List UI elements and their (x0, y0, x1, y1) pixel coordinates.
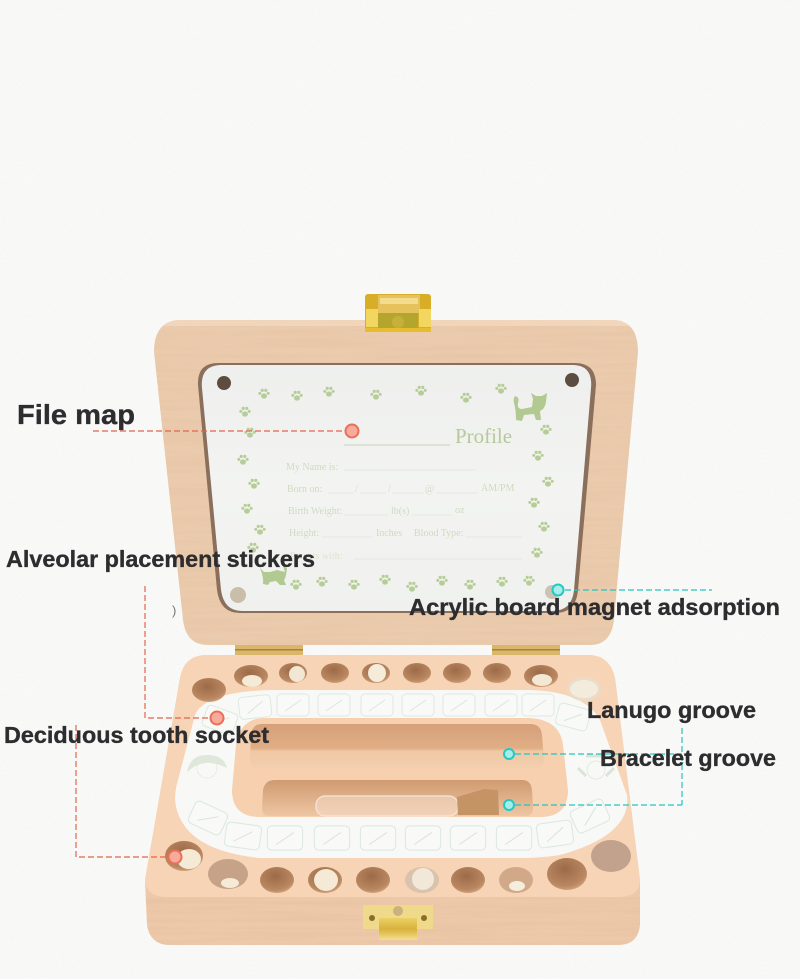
icon: cat top right (514, 393, 547, 421)
callout: file map (17, 399, 358, 438)
icon: cat bottom left (260, 566, 287, 585)
base of the box (140, 655, 645, 947)
profile form: Inches (376, 528, 402, 539)
sticker cells top row (201, 694, 591, 736)
profile form: / (388, 484, 391, 495)
callout: deciduous tooth socket (4, 722, 269, 864)
icon: child face (187, 755, 227, 778)
profile form: Birth Weight: (288, 506, 342, 517)
callout: alveolar placement stickers (6, 546, 315, 724)
callout: file map: File map (17, 399, 135, 430)
profile form: Height: (289, 528, 319, 539)
profile heading: Profile (455, 424, 512, 448)
stray mark: ) (172, 603, 176, 618)
magnets (217, 373, 579, 603)
profile form (286, 462, 522, 562)
bracelet groove with glass tube and cork (262, 780, 533, 816)
callout: deciduous tooth socket: Deciduous tooth socket (4, 722, 269, 748)
front clasp (363, 905, 433, 940)
profile form: / (355, 484, 358, 495)
tooth sockets bottom row (165, 840, 631, 893)
profile form: Born on: (287, 484, 322, 495)
callout: lanugo groove (504, 697, 756, 805)
top clasp (365, 294, 431, 332)
lid of the box (150, 318, 642, 648)
callout: lanugo groove: Lanugo groove (587, 697, 756, 723)
tooth sockets top row (192, 663, 601, 702)
profile form: Parents with: (290, 551, 342, 562)
profile form: Blood Type: (414, 528, 463, 539)
callout: alveolar placement stickers: Alveolar placement stickers (6, 546, 315, 572)
profile form: My Name is: (286, 462, 338, 473)
lanugo groove (250, 724, 544, 768)
lid window recess (198, 363, 596, 613)
profile form: AM/PM (481, 483, 514, 494)
paw print border (237, 384, 554, 592)
alveolar sticker sheet (175, 690, 627, 858)
hinges (235, 645, 560, 655)
callout: bracelet groove (504, 745, 776, 810)
callout: bracelet groove: Bracelet groove (600, 745, 776, 771)
callout: acrylic board magnet adsorption: Acrylic board magnet adsorption (409, 594, 780, 620)
icon: sticker face right (578, 756, 614, 779)
central wood island (232, 718, 568, 817)
acrylic board (202, 365, 591, 611)
profile form: lb(s) (391, 506, 409, 517)
sticker cells bottom row (187, 798, 611, 850)
profile form: oz (455, 505, 465, 516)
profile form: @ (425, 484, 434, 495)
